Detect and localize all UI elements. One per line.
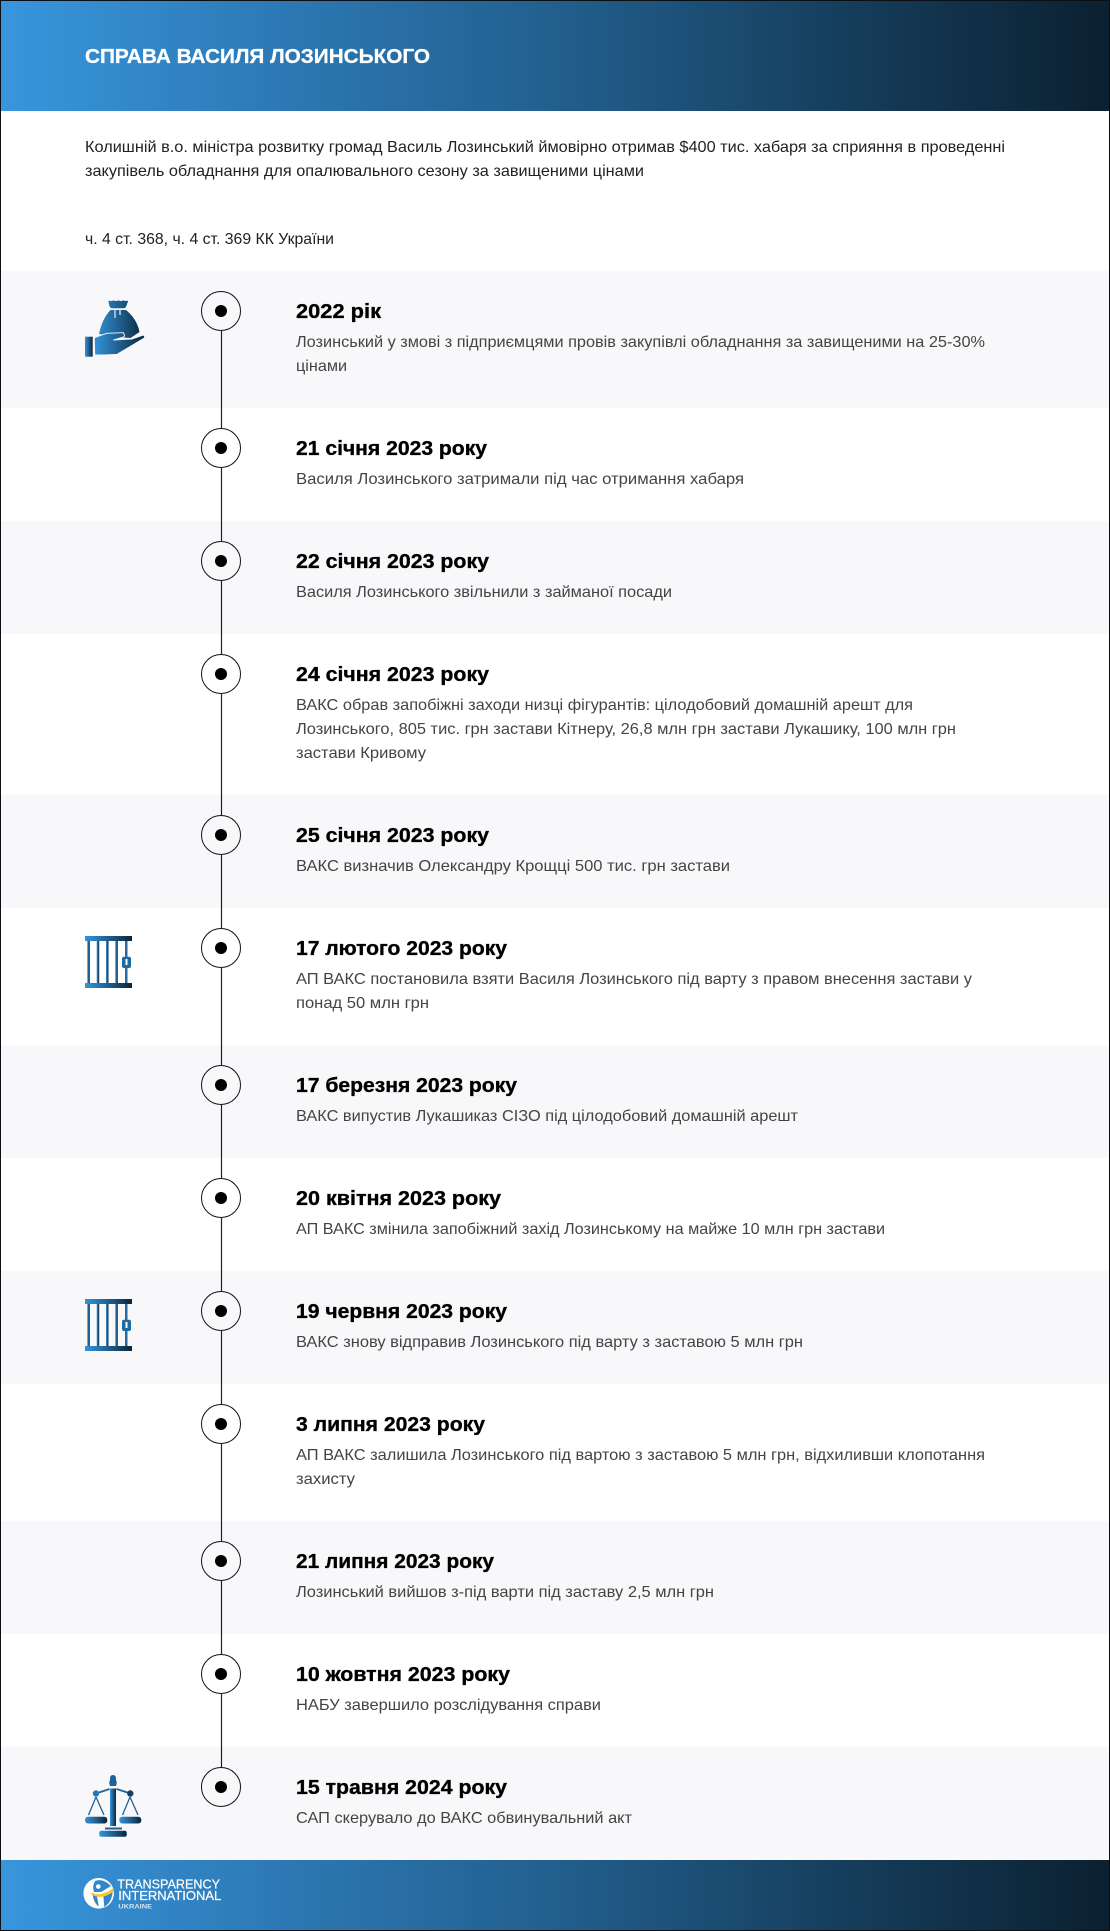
marker bbox=[202, 816, 240, 854]
row: 22 січня 2023 bbox=[0, 521, 1110, 634]
marker bbox=[202, 1542, 240, 1580]
description: АП ВАКС постановила взяти Василя Лозинського під варту з правом внесення застави у bbox=[296, 971, 972, 988]
row: 15 травня 2024 bbox=[0, 1747, 1110, 1860]
description: АП ВАКС залишила Лозинського під вартою з заставою 5 млн грн, відхиливши клопотання bbox=[296, 1447, 985, 1464]
logo: Transparency International Ukraine: UKRAINE bbox=[118, 1904, 153, 1910]
heading: 24 січня 2023 року bbox=[296, 663, 490, 686]
description bbox=[296, 697, 956, 762]
marker bbox=[202, 1404, 240, 1444]
heading: 2022 рік bbox=[296, 300, 382, 323]
marker bbox=[202, 1066, 240, 1104]
row: 19 червня 2023 bbox=[0, 1271, 1110, 1384]
heading: 17 березня 2023 року bbox=[296, 1074, 518, 1097]
row: 21 липня 2023 bbox=[0, 1521, 1110, 1634]
heading: 10 жовтня 2023 року bbox=[296, 1663, 511, 1686]
marker bbox=[202, 1654, 240, 1694]
description: САП скерувало до ВАКС обвинувальний акт bbox=[296, 1810, 633, 1827]
footer banner bbox=[0, 1860, 1110, 1931]
row: 25 січня 2023 bbox=[0, 795, 1110, 908]
heading: 22 січня 2023 року bbox=[296, 550, 490, 573]
description: Лозинський у змові з підприємцями провів закупівлі обладнання за завищеними на 25-30% bbox=[296, 334, 985, 351]
marker bbox=[202, 1292, 240, 1330]
description: ВАКС визначив Олександру Крощці 500 тис. грн застави bbox=[296, 858, 730, 875]
icon: money bag on hand bbox=[85, 300, 145, 357]
row: 17 березня 2023 bbox=[0, 1045, 1110, 1158]
row: 17 лютого 2023 bbox=[0, 908, 1110, 1045]
header banner bbox=[0, 0, 1110, 111]
row: 3 липня 2023 bbox=[0, 1384, 1110, 1521]
heading: 21 січня 2023 року bbox=[296, 437, 488, 460]
timeline line bbox=[220, 331, 222, 1767]
row: 20 квітня 2023 bbox=[0, 1158, 1110, 1271]
row: 21 січня 2023 bbox=[0, 408, 1110, 521]
description bbox=[296, 334, 985, 375]
heading: 21 липня 2023 року bbox=[296, 1550, 495, 1573]
heading: 19 червня 2023 року bbox=[296, 1300, 508, 1323]
intro text: Колишній в.о. міністра розвитку громад Василь Лозинський ймовірно отримав $400 тис. хабаря за сприяння в проведенні bbox=[85, 139, 1005, 156]
icon: prison bars bbox=[85, 936, 132, 988]
heading: 25 січня 2023 року bbox=[296, 824, 490, 847]
marker bbox=[202, 654, 240, 694]
legal articles: ч. 4 ст. 368, ч. 4 ст. 369 КК України bbox=[85, 231, 334, 248]
marker bbox=[202, 542, 240, 580]
marker bbox=[202, 428, 240, 468]
description: цінами bbox=[296, 358, 347, 375]
logo globe bbox=[83, 1878, 114, 1909]
description: ВАКС випустив Лукашиказ СІЗО під цілодобовий домашній арешт bbox=[296, 1108, 799, 1125]
intro text bbox=[85, 139, 1005, 180]
row: 2022 рік bbox=[0, 271, 1110, 408]
description: Лозинського, 805 тис. грн застави Кітнеру, 26,8 млн грн застави Лукашику, 100 млн грн bbox=[296, 721, 956, 738]
marker bbox=[202, 1178, 240, 1218]
intro text: закупівель обладнання для опалювального сезону за завищеними цінами bbox=[85, 163, 644, 180]
row: 10 жовтня 2023 bbox=[0, 1634, 1110, 1747]
logo: Transparency International Ukraine bbox=[83, 1878, 221, 1910]
description: ВАКС обрав запобіжні заходи низці фігурантів: цілодобовий домашній арешт для bbox=[296, 697, 913, 714]
description: НАБУ завершило розслідування справи bbox=[296, 1697, 601, 1714]
icon: prison bars bbox=[85, 1299, 132, 1351]
description bbox=[296, 1447, 985, 1488]
icon: scales of justice bbox=[85, 1775, 141, 1837]
description bbox=[296, 971, 972, 1012]
title: СПРАВА ВАСИЛЯ ЛОЗИНСЬКОГО bbox=[85, 45, 430, 68]
row: 24 січня 2023 bbox=[0, 634, 1110, 795]
heading: 17 лютого 2023 року bbox=[296, 937, 508, 960]
description: захисту bbox=[296, 1471, 355, 1488]
heading: 15 травня 2024 року bbox=[296, 1776, 508, 1799]
logo text: TRANSPARENCY bbox=[117, 1878, 221, 1892]
marker bbox=[202, 292, 240, 330]
description: Лозинський вийшов з-під варти під заставу 2,5 млн грн bbox=[296, 1584, 714, 1601]
description: застави Кривому bbox=[296, 745, 426, 762]
description: понад 50 млн грн bbox=[296, 995, 429, 1012]
description: Василя Лозинського затримали під час отримання хабаря bbox=[296, 471, 744, 488]
description: АП ВАКС змінила запобіжний захід Лозинському на майже 10 млн грн застави bbox=[296, 1221, 885, 1238]
marker bbox=[202, 928, 240, 968]
description: ВАКС знову відправив Лозинського під варту з заставою 5 млн грн bbox=[296, 1334, 803, 1351]
heading: 3 липня 2023 року bbox=[296, 1413, 486, 1436]
description: Василя Лозинського звільнили з займаної посади bbox=[296, 584, 672, 601]
logo: Transparency International Ukraine: INTERNATIONAL bbox=[118, 1889, 221, 1903]
heading: 20 квітня 2023 року bbox=[296, 1187, 502, 1210]
marker bbox=[202, 1768, 240, 1806]
